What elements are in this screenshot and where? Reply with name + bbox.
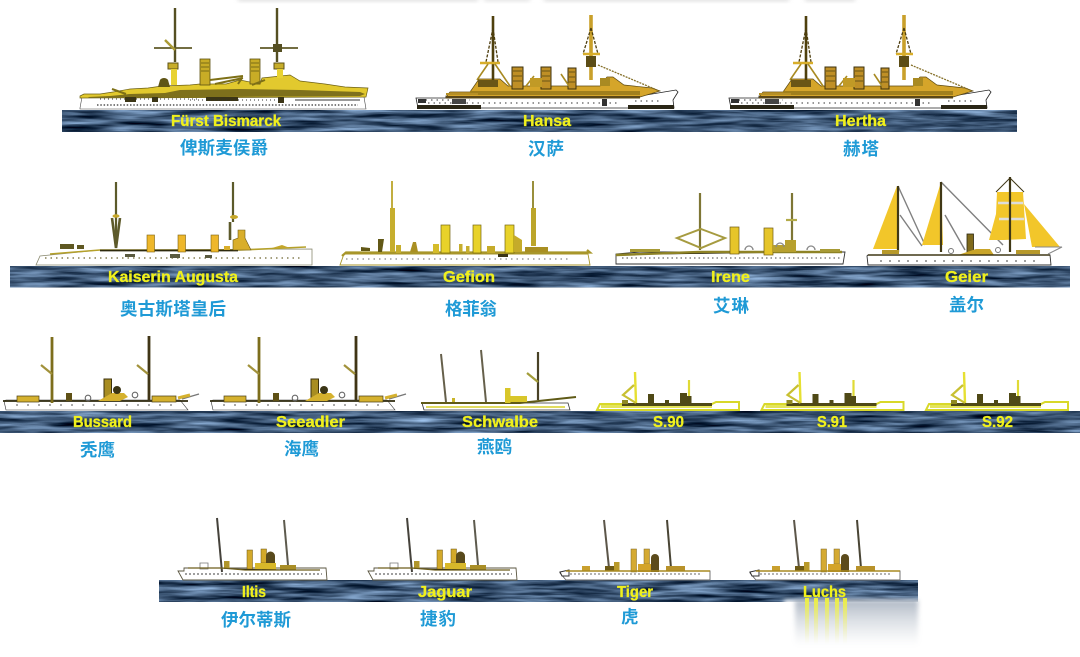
ship: Kaiserin Augusta <box>36 182 312 265</box>
Chinese ship names: 伊尔蒂斯 <box>221 610 291 630</box>
Chinese ship names: 燕鸥 <box>477 437 512 457</box>
ship names on the sea: Seeadler <box>276 414 345 431</box>
ship names on the sea: S.91 <box>817 414 847 431</box>
ship: Schwalbe <box>421 350 576 410</box>
ship names on the sea: Gefion <box>443 269 495 286</box>
Chinese ship names: 汉萨 <box>528 139 564 159</box>
ship: Irene <box>616 193 845 264</box>
ship: Tiger <box>560 520 710 580</box>
ship names on the sea: Iltis <box>242 584 266 601</box>
ship: S.90 <box>597 372 739 410</box>
ship names on the sea: Tiger <box>617 584 653 601</box>
Chinese ship names: 赫塔 <box>843 139 880 159</box>
Chinese ship names: 秃鹰 <box>80 440 115 460</box>
ship: S.91 <box>762 372 904 410</box>
Chinese ship names: 盖尔 <box>949 295 984 315</box>
smeared fade artifact at lower right <box>784 598 922 650</box>
Chinese ship names: 奥古斯塔皇后 <box>120 299 226 319</box>
sea band: row 3 <box>0 411 1080 433</box>
ship: Luchs <box>750 520 900 580</box>
Chinese ship names: 虎 <box>621 607 638 627</box>
ship names on the sea: Bussard <box>73 414 132 431</box>
ship: Bussard <box>3 336 199 410</box>
ship: Seeadler <box>210 336 406 410</box>
sea band: row 1 <box>62 110 1017 132</box>
ship: Hansa <box>416 15 678 109</box>
ship names on the sea: Irene <box>711 269 750 286</box>
top edge shadow <box>238 0 855 1</box>
ship: Fürst Bismarck <box>80 8 368 109</box>
ship names on the sea: Kaiserin Augusta <box>108 269 238 286</box>
ship: Geier <box>867 177 1062 265</box>
Chinese ship names: 俾斯麦侯爵 <box>180 138 268 158</box>
ship names on the sea: Fürst Bismarck <box>171 113 281 130</box>
Chinese ship names: 海鹰 <box>284 439 319 459</box>
sea band: row 2 <box>10 266 1070 288</box>
ship: Hertha <box>729 15 991 109</box>
ship: Gefion <box>340 181 590 265</box>
ship: Iltis <box>178 518 327 580</box>
ship names on the sea: Schwalbe <box>462 414 538 431</box>
ship names on the sea: Geier <box>945 269 988 286</box>
ship names on the sea: Hansa <box>523 113 571 130</box>
Chinese ship names <box>80 138 984 630</box>
ship names on the sea <box>73 113 1013 601</box>
ship names on the sea: S.92 <box>982 414 1013 431</box>
ship names on the sea: Hertha <box>835 113 886 130</box>
Chinese ship names: 艾琳 <box>713 296 750 316</box>
ship names on the sea: S.90 <box>653 414 684 431</box>
Chinese ship names: 格菲翁 <box>445 299 497 319</box>
ship: Jaguar <box>368 518 517 580</box>
ship names on the sea: Luchs <box>803 584 846 601</box>
ship names on the sea: Jaguar <box>418 584 472 601</box>
ship: S.92 <box>926 372 1068 410</box>
sea band: row 4 <box>159 580 918 602</box>
Chinese ship names: 捷豹 <box>420 609 456 629</box>
